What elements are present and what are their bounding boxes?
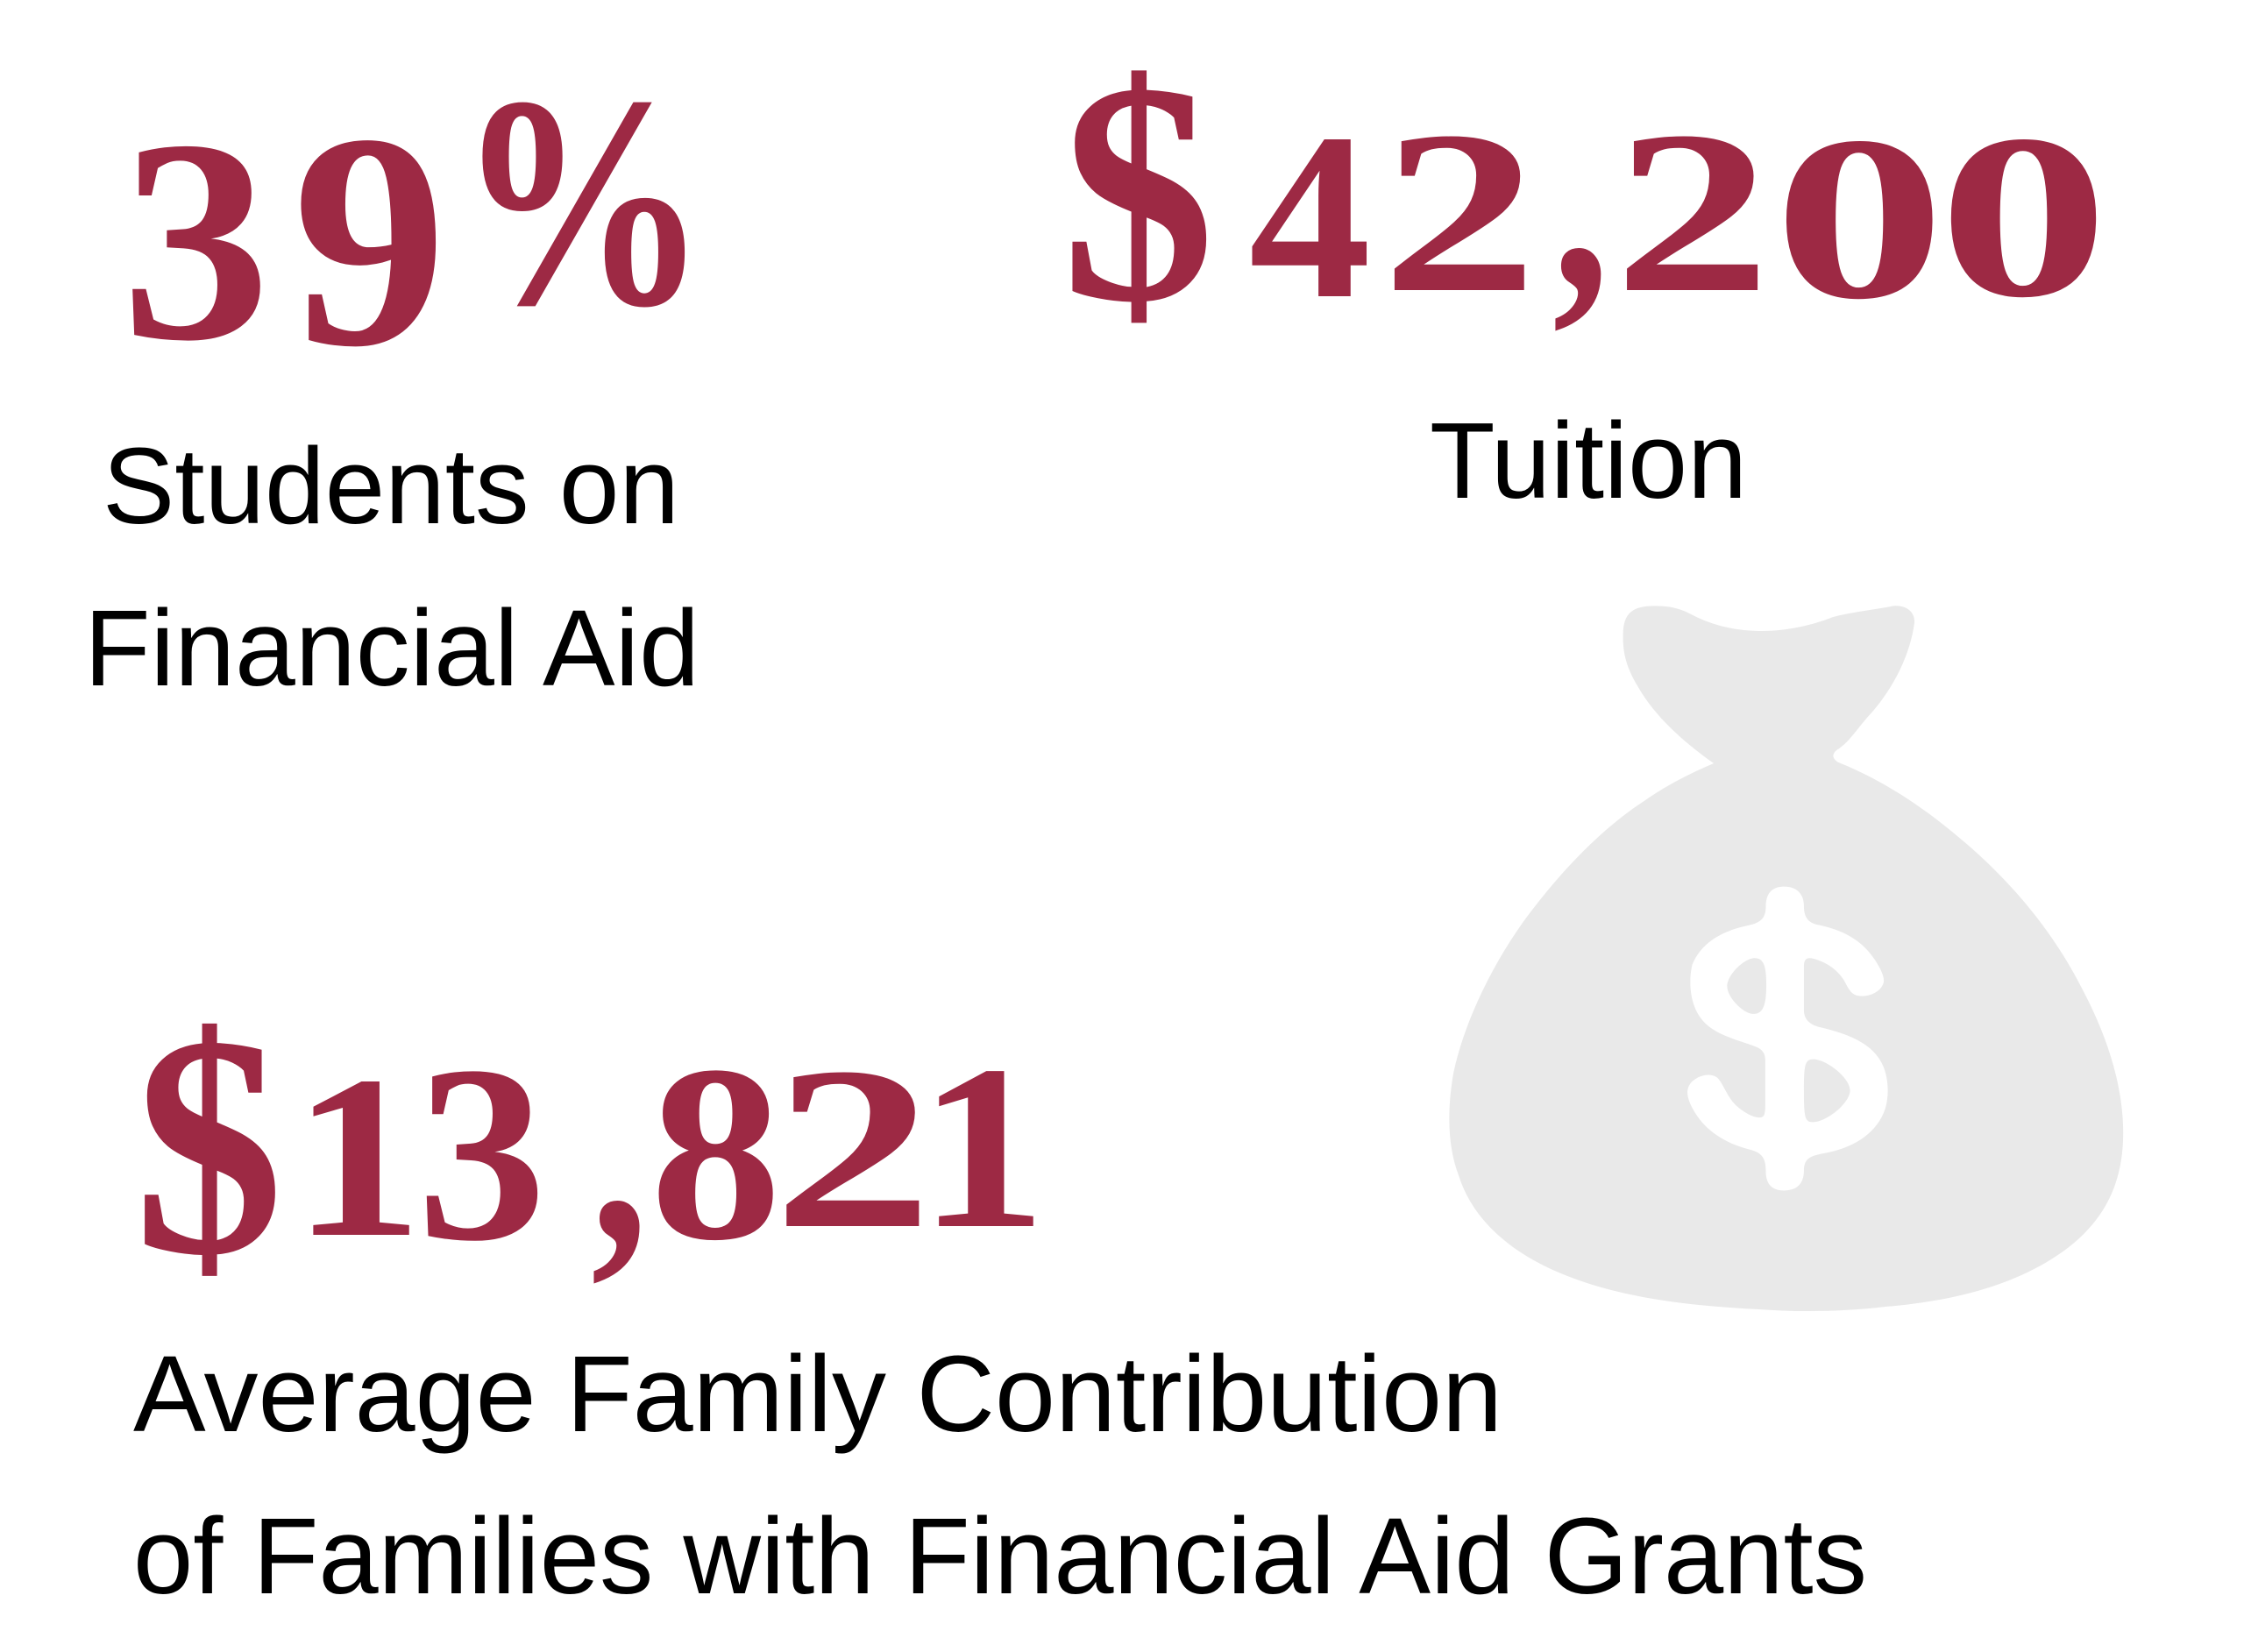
statistic: $42,200: $ <box>1062 18 1215 367</box>
statistic: $42,200: , <box>1552 45 1609 348</box>
statistic: 39%: 3 <box>121 81 270 401</box>
statistic: $42,200: 2 <box>1381 83 1537 340</box>
statistic: $13,821: 3 <box>417 1014 546 1294</box>
statistic: $13,821: 1 <box>919 1017 1047 1277</box>
statistic: $42,200: 4 <box>1249 83 1371 348</box>
statistic: $13,821: 1 <box>293 1028 423 1285</box>
statistic: $42,200: 0 <box>1938 87 2109 346</box>
statistic: $13,821: $ <box>134 971 283 1321</box>
statistic: $13,821: 8 <box>650 1013 782 1293</box>
label: Average Family Contribution of Families with Financial Aid Grants <box>133 1335 1867 1617</box>
statistic: 39%: % <box>457 33 708 369</box>
statistic: $13,821: , <box>591 997 648 1301</box>
statistic: 39% <box>121 33 708 410</box>
statistic: $42,200 <box>1062 18 2109 367</box>
statistic: $13,821 <box>134 971 1047 1321</box>
label: Students on Financial Aid <box>84 427 699 709</box>
label: Average Family Contribution of Families with Financial Aid Grants: of Families with Financial Aid Grants <box>133 1497 1867 1617</box>
statistic: $13,821: 2 <box>773 1019 933 1276</box>
icon: money bag <box>1449 606 2123 1311</box>
label: Students on Financial Aid: Students on <box>103 427 679 547</box>
label: Average Family Contribution of Families with Financial Aid Grants: Average Family Contribution <box>133 1335 1502 1455</box>
statistic: $42,200: 2 <box>1614 84 1772 341</box>
label: Tuition: Tuition <box>1430 401 1747 521</box>
label: Students on Financial Aid: Financial Aid <box>84 589 699 709</box>
statistic: $42,200: 0 <box>1773 89 1946 348</box>
statistic: 39%: 9 <box>293 70 447 410</box>
